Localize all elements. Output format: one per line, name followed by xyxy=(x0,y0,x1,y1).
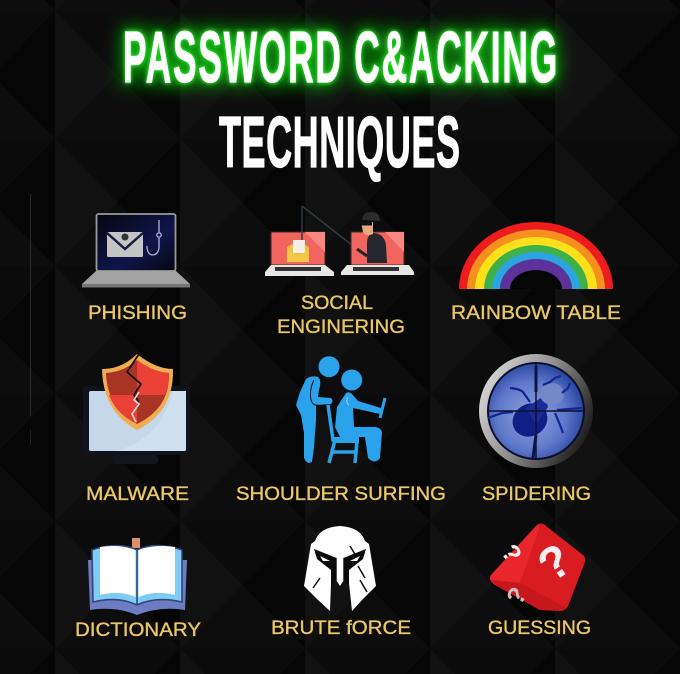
label: phishing: PHISHING xyxy=(88,302,187,324)
title: Password Cracking: PASSWORD C&ACKING xyxy=(123,19,557,99)
icon: red question-mark die xyxy=(490,524,585,611)
label: spidering: SPIDERING xyxy=(482,483,591,505)
panel: spidering xyxy=(479,354,593,505)
label: guessing: GUESSING xyxy=(488,617,591,639)
label: social engineering: ENGINERING xyxy=(277,316,405,338)
title: Password Cracking: PASSWORD C&ACKING xyxy=(123,19,557,99)
icon: fishing laptops and hacker xyxy=(265,206,414,276)
panel: guessing xyxy=(488,524,591,639)
panel: malware xyxy=(83,354,190,505)
label: malware: MALWARE xyxy=(86,483,189,505)
label: dictionary: DICTIONARY xyxy=(75,619,201,641)
icon: red question-mark die: ? xyxy=(528,533,581,592)
icon: rainbow xyxy=(459,222,613,289)
label: rainbow table: RAINBOW TABLE xyxy=(451,302,621,324)
label: shoulder surfing: SHOULDER SURFING xyxy=(236,483,446,505)
label: brute force: BRUTE fORCE xyxy=(271,617,411,639)
icon: person watching seated user xyxy=(296,356,385,463)
panel: phishing xyxy=(82,214,190,324)
title: Techniques: TECHNIQUES xyxy=(219,102,460,183)
icon: spartan helmet xyxy=(304,526,376,611)
label: social engineering: SOCIAL xyxy=(301,292,373,314)
icon: laptop with envelope and hook xyxy=(82,214,190,288)
icon: red question-mark die: ? xyxy=(501,582,533,610)
panel: social engineering xyxy=(265,206,414,338)
panel: shoulder surfing xyxy=(236,356,446,505)
icon: red question-mark die: ? xyxy=(495,539,527,568)
icon: open book xyxy=(88,538,187,615)
panel: rainbow table xyxy=(451,222,621,324)
icon: monitor with cracked shield xyxy=(83,354,190,464)
title: Password Cracking: PASSWORD C&ACKING xyxy=(123,19,557,99)
panel: dictionary xyxy=(75,538,201,641)
icon: bug in crosshair scope xyxy=(479,354,593,468)
panel: brute force xyxy=(271,526,411,639)
label: social engineering xyxy=(277,292,405,338)
